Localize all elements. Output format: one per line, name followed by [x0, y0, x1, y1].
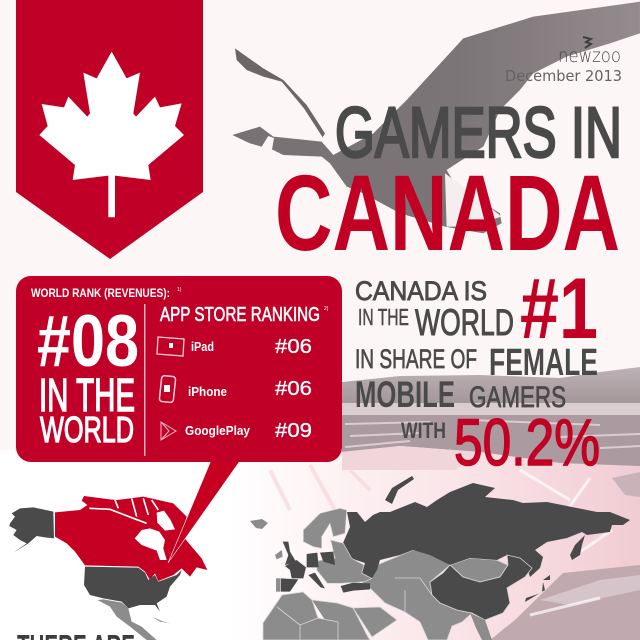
Hudson Bay [135, 528, 167, 560]
Scandinavia [303, 508, 347, 548]
USA [84, 567, 182, 612]
Cuba [152, 617, 170, 623]
map: Mongolia [450, 558, 508, 582]
photo: flying goose [232, 2, 640, 233]
text: gamers: GAMERS [469, 381, 566, 414]
text: in share of: IN SHARE OF [355, 344, 477, 374]
text: Canada is: CANADA IS [355, 276, 487, 306]
map: China [430, 555, 532, 620]
Ireland [275, 550, 283, 559]
map: Japan [525, 575, 550, 602]
icon: Google Play [161, 422, 176, 440]
world: WORLD [40, 409, 134, 450]
Arctic channels [89, 498, 158, 523]
map: Russia [343, 483, 630, 578]
iPhone rank: #06 [275, 378, 312, 400]
map: Novaya Zemlya [385, 476, 414, 504]
world rank number: #08 [37, 301, 139, 382]
world rank label: WORLD RANK (REVENUES): [31, 286, 170, 300]
map: North America [9, 496, 207, 640]
map: Arabia [353, 607, 397, 637]
UK [283, 542, 296, 565]
panel: world and app store rank [16, 276, 342, 462]
map: Sakhalin [570, 535, 585, 560]
newzoo logo [558, 37, 621, 67]
panel background [16, 276, 342, 462]
Germany [307, 553, 319, 567]
text: with: WITH [401, 418, 446, 443]
GooglePlay rank: #09 [275, 420, 312, 442]
Turkey [341, 583, 370, 593]
Foxe Basin [157, 511, 175, 531]
title [275, 94, 622, 273]
Poland [320, 552, 335, 565]
Mexico and Central America [97, 599, 157, 640]
Eastern Europe [317, 540, 372, 583]
text: mobile: MOBILE [355, 374, 455, 415]
stat: 50.2 percent: 50.2% [454, 405, 600, 479]
iPad label: iPad [191, 339, 214, 354]
Spain [281, 578, 298, 592]
map: Africa [263, 592, 370, 640]
map: Iceland [250, 519, 268, 529]
map: Southeast Asia [470, 613, 492, 640]
icon: iPad [157, 337, 184, 356]
shield with maple leaf [16, 0, 203, 259]
Alaska [9, 507, 54, 553]
icon: iPhone [159, 375, 176, 403]
text: in the: IN THE [358, 304, 409, 330]
GooglePlay label: GooglePlay [185, 423, 251, 438]
footnote 2: 2) [324, 306, 329, 312]
France [285, 560, 306, 578]
in the: IN THE [39, 369, 135, 421]
footnote 1: 1) [177, 287, 182, 293]
world map [9, 476, 630, 640]
stat: number one: #1 [520, 261, 598, 357]
divider [144, 304, 146, 456]
iPhone label: iPhone [188, 384, 227, 399]
text: world: WORLD [415, 302, 514, 343]
Italy [308, 573, 325, 588]
callout pointer [168, 458, 242, 563]
icon: newzoo mark [583, 37, 591, 48]
map: Europe [275, 508, 372, 593]
date: December 2013 [505, 67, 622, 85]
map: Central and South Asia [362, 550, 472, 640]
shield [16, 0, 203, 259]
Portugal [276, 578, 280, 592]
statement: female mobile gamers [355, 261, 600, 479]
photo: waterfall [0, 367, 640, 640]
app store heading: APP STORE RANKING [160, 304, 320, 326]
icon: maple leaf [39, 52, 184, 217]
brand name: newzoo [558, 45, 621, 67]
Canada [55, 496, 207, 581]
iPad rank: #06 [275, 336, 312, 358]
